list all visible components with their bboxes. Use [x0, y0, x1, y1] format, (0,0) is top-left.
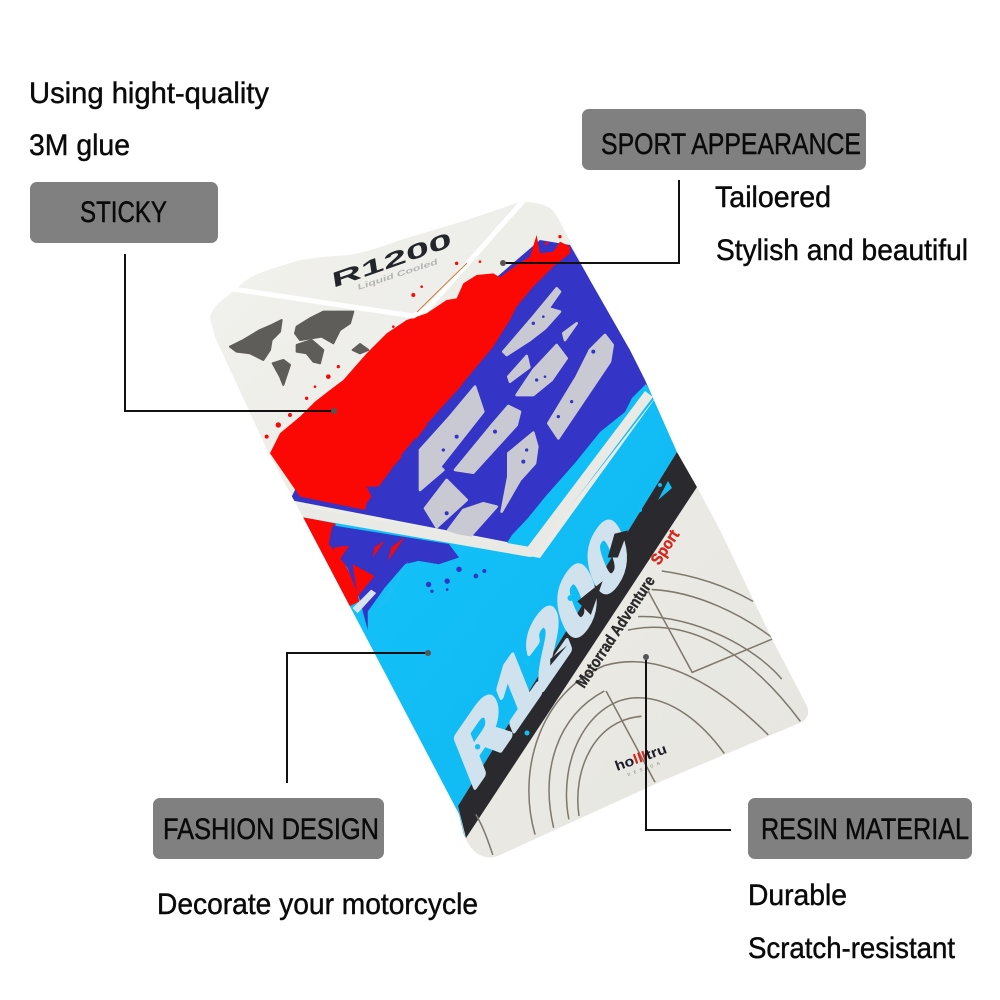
- Sport text: Sport: [648, 527, 684, 568]
- upper white stripe: [233, 200, 524, 316]
- pad artwork: [230, 200, 800, 860]
- callout: sticky leader: [125, 254, 337, 414]
- Motorrad Adventure text: Motorrad Adventure: [573, 573, 659, 691]
- big R1200 lettering: R1200: [447, 496, 638, 807]
- thin orange line: [417, 263, 467, 312]
- lettering wear: [475, 530, 628, 749]
- brand logo: hollltru: [613, 740, 669, 774]
- lower brush strokes: [302, 517, 486, 630]
- label: sport appearance: [582, 109, 866, 170]
- text block: glue description: Using hight-quality: [29, 77, 269, 110]
- text block: glue description: [29, 77, 269, 162]
- compass arcs: [476, 571, 800, 855]
- label: sport appearance: SPORT APPEARANCE: [601, 128, 861, 161]
- white chevron stripe lower: [290, 394, 649, 552]
- blue band: [290, 240, 652, 548]
- cyan lower field: [303, 400, 677, 860]
- callout: fashion design leader: [287, 650, 431, 783]
- world map: [230, 312, 368, 385]
- black stripe: [458, 452, 697, 838]
- label: fashion design: [153, 798, 384, 859]
- text block: resin description: Scratch-resistant: [748, 932, 956, 965]
- grey R1200 graphic on blue: [420, 288, 613, 537]
- callout: sport appearance leader: [500, 180, 679, 266]
- text block: glue description: 3M glue: [29, 129, 130, 162]
- label: sticky: [30, 182, 218, 243]
- label: resin material: [748, 798, 972, 859]
- label: fashion design: FASHION DESIGN: [163, 813, 379, 846]
- red band: [265, 235, 570, 510]
- text block: sport description: Stylish and beautiful: [716, 234, 968, 267]
- text block: resin description: [748, 879, 956, 965]
- callout: resin material leader: [643, 654, 731, 830]
- text block: sport description: [715, 181, 968, 267]
- text block: fashion description: Decorate your motorcycle: [157, 888, 478, 921]
- Liquid Cooled label: Liquid Cooled: [357, 257, 438, 292]
- top R1200 logo: R1200: [330, 228, 453, 293]
- brand sub label: DESIGN: [627, 761, 660, 777]
- cyan wedge above stripe: [505, 384, 655, 548]
- text block: resin description: Durable: [748, 879, 847, 912]
- panel: tank pad product: [210, 200, 808, 860]
- speckles on black: [524, 481, 672, 736]
- pad base shape: [210, 202, 808, 858]
- text block: sport description: Tailoered: [715, 181, 831, 214]
- label: sticky: STICKY: [80, 196, 167, 229]
